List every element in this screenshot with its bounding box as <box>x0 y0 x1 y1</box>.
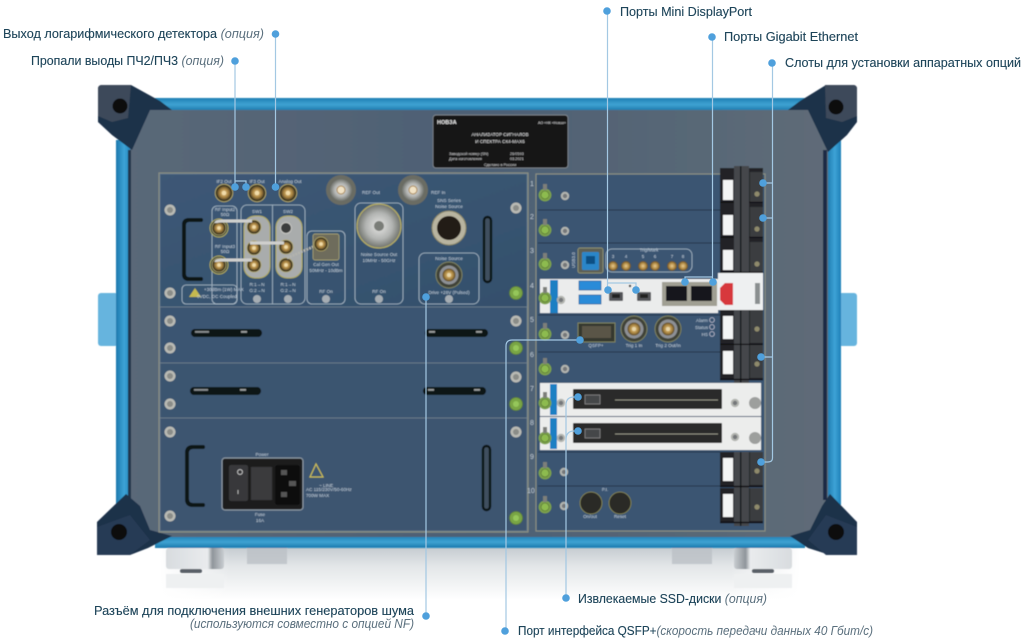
label: Порт интерфейса QSFP+(скорость передачи данных 40 Гбит/с) <box>518 623 873 638</box>
left module panel <box>159 173 528 532</box>
panel knobs PLI: Reset <box>614 514 627 519</box>
QSFP and trigger row <box>578 316 714 348</box>
SSD cards <box>539 383 761 450</box>
USB and trigger row: 4 <box>625 254 628 259</box>
QSFP and trigger row: Trig 1 In <box>626 343 643 348</box>
module: RF inputs <box>160 174 527 307</box>
module: RF inputs: +30dBm (1W) MAX <box>204 287 244 292</box>
slot dividers and knobs: 9 <box>530 454 534 461</box>
module: RF inputs: RF On <box>319 289 333 294</box>
USB and trigger row: 7 <box>671 254 674 259</box>
module: blank 2 <box>160 363 527 418</box>
label: Слоты для установки аппаратных опций <box>785 55 1021 70</box>
label: Пропали выоды ПЧ2/ПЧ3 (опция) <box>31 53 224 68</box>
module: RF inputs: RF On <box>372 289 386 294</box>
module: RF inputs: G:2→N <box>249 288 265 293</box>
slot dividers and knobs: 6 <box>530 352 534 359</box>
nameplate: 26/0593 <box>510 152 524 156</box>
leader <box>681 33 717 286</box>
module: RF inputs: 10MHz - 50GHz <box>363 258 396 263</box>
label: Порты Gigabit Ethernet <box>724 29 858 44</box>
nameplate <box>433 115 568 168</box>
module: RF inputs: REF In <box>431 190 446 195</box>
module: RF inputs: RF Input2 <box>215 207 236 212</box>
panel knobs PLI: On/out <box>583 514 598 519</box>
callout: removable SSD <box>562 393 767 606</box>
module: RF inputs: R:1→N <box>249 282 265 287</box>
module: RF inputs: SW1 <box>252 209 262 214</box>
module: power: 700W MAX <box>306 493 329 498</box>
callout: log detector output <box>3 26 279 191</box>
module: RF inputs: REF Out <box>362 190 381 195</box>
chassis back plate <box>130 110 828 537</box>
USB and trigger row: 5 <box>642 254 645 259</box>
USB and trigger row <box>571 248 692 273</box>
module: RF inputs: RF Input3 <box>215 244 236 249</box>
module: RF inputs: Drive +28V (Pulsed) <box>428 290 470 295</box>
USB and trigger row: USB3.0 <box>571 252 576 268</box>
module: RF inputs: 50MHz - 10dBm <box>309 268 343 273</box>
module: power: Power <box>255 452 269 457</box>
module: RF inputs: G:2→N <box>280 288 296 293</box>
slot dividers and knobs: 10 <box>527 488 535 495</box>
slot dividers and knobs: 1 <box>530 181 534 188</box>
module: RF inputs: Noise Source <box>435 204 463 209</box>
callout: IF2/IF3 outputs <box>31 53 250 191</box>
leader <box>603 7 640 294</box>
QSFP and trigger row: Alarm <box>696 318 708 323</box>
module: power <box>160 418 527 531</box>
analyzer rear panel <box>97 85 857 588</box>
USB and trigger row: Trig/Mark <box>640 248 659 252</box>
blue frame <box>116 98 841 548</box>
callout: noise generator connector <box>94 293 430 631</box>
nameplate: АНАЛИЗАТОР СИГНАЛОВ <box>471 132 529 137</box>
leader <box>231 57 250 191</box>
callout: hardware option slots <box>757 55 1021 466</box>
white IO card <box>539 279 718 313</box>
nameplate: И СПЕКТРА СК4-МАХ6 <box>475 139 525 144</box>
corner bumpers <box>97 85 857 555</box>
USB and trigger row: 6 <box>654 254 657 259</box>
module: RF inputs: R:1→N <box>280 282 296 287</box>
leader <box>272 30 279 191</box>
module: RF inputs: Noise Source Out <box>361 252 398 257</box>
slot dividers and knobs: 5 <box>530 317 534 324</box>
callout: QSFP+ port <box>501 336 873 638</box>
module: power: 16A <box>256 518 265 523</box>
module: power: ~ LINE <box>319 483 333 488</box>
nameplate: Заводской номер (SN) <box>449 152 489 156</box>
nameplate: 03.2021 <box>510 157 524 161</box>
label: Извлекаемые SSD-диски (опция) <box>578 591 767 606</box>
reflection under device <box>160 548 800 600</box>
module: RF inputs: Noise Source <box>435 256 463 261</box>
label: Выход логарифмического детектора (опция) <box>3 26 264 41</box>
label: Порты Mini DisplayPort <box>620 4 752 19</box>
module: RF inputs: 50Ω <box>221 249 230 254</box>
leader <box>501 336 584 635</box>
USB and trigger row: 3 <box>612 254 615 259</box>
callout: Mini DisplayPort <box>603 4 752 294</box>
slot dividers and knobs: 7 <box>530 386 534 393</box>
slot dividers and knobs: 4 <box>530 283 534 290</box>
module: RF inputs: 0VDC, DC Coupled <box>197 294 237 299</box>
QSFP and trigger row: HS <box>702 332 708 337</box>
panel knobs PLI: P.I. <box>602 487 608 492</box>
module: power: Fuse <box>255 512 266 517</box>
module: RF inputs: Cal Gen Out <box>313 262 339 267</box>
slot dividers and knobs: 2 <box>530 214 534 221</box>
leader <box>422 293 430 620</box>
nameplate: АО «НК «Новза» <box>538 121 566 125</box>
module: RF inputs: IF3 Out <box>249 179 265 184</box>
QSFP and trigger row: Trig 2 Out/In <box>655 343 681 348</box>
module: RF inputs: Analog Out <box>278 179 302 184</box>
rubber feet <box>166 548 792 588</box>
nameplate: НОВЗА <box>437 120 457 126</box>
nameplate: Сделано в России <box>484 163 516 167</box>
module: RF inputs: 50Ω <box>221 212 230 217</box>
latches <box>718 166 763 526</box>
module: RF inputs: IF2 Out <box>216 179 232 184</box>
callout: Gigabit Ethernet <box>681 29 858 286</box>
leader <box>757 59 776 466</box>
panel knobs PLI <box>580 487 631 519</box>
leader <box>562 393 582 602</box>
module: blank 1 <box>160 307 527 363</box>
USB and trigger row: 8 <box>682 254 685 259</box>
QSFP and trigger row: Status <box>695 325 709 330</box>
note: (используются совместно с опцией NF) <box>190 616 414 631</box>
module: power: AC 115/230V/50-60Hz <box>306 487 352 492</box>
slot dividers and knobs: 8 <box>530 420 534 427</box>
slot dividers and knobs <box>527 181 720 513</box>
right slot panel <box>527 166 765 531</box>
nameplate: Дата изготовления <box>449 157 482 161</box>
module: RF inputs: SNS Series <box>437 198 462 203</box>
module: RF inputs: SW2 <box>283 209 293 214</box>
slot dividers and knobs: 3 <box>530 248 534 255</box>
label: Разъём для подключения внешних генераторов шума <box>94 603 415 618</box>
side tabs <box>98 293 857 346</box>
QSFP and trigger row: QSFP+ <box>588 343 604 348</box>
